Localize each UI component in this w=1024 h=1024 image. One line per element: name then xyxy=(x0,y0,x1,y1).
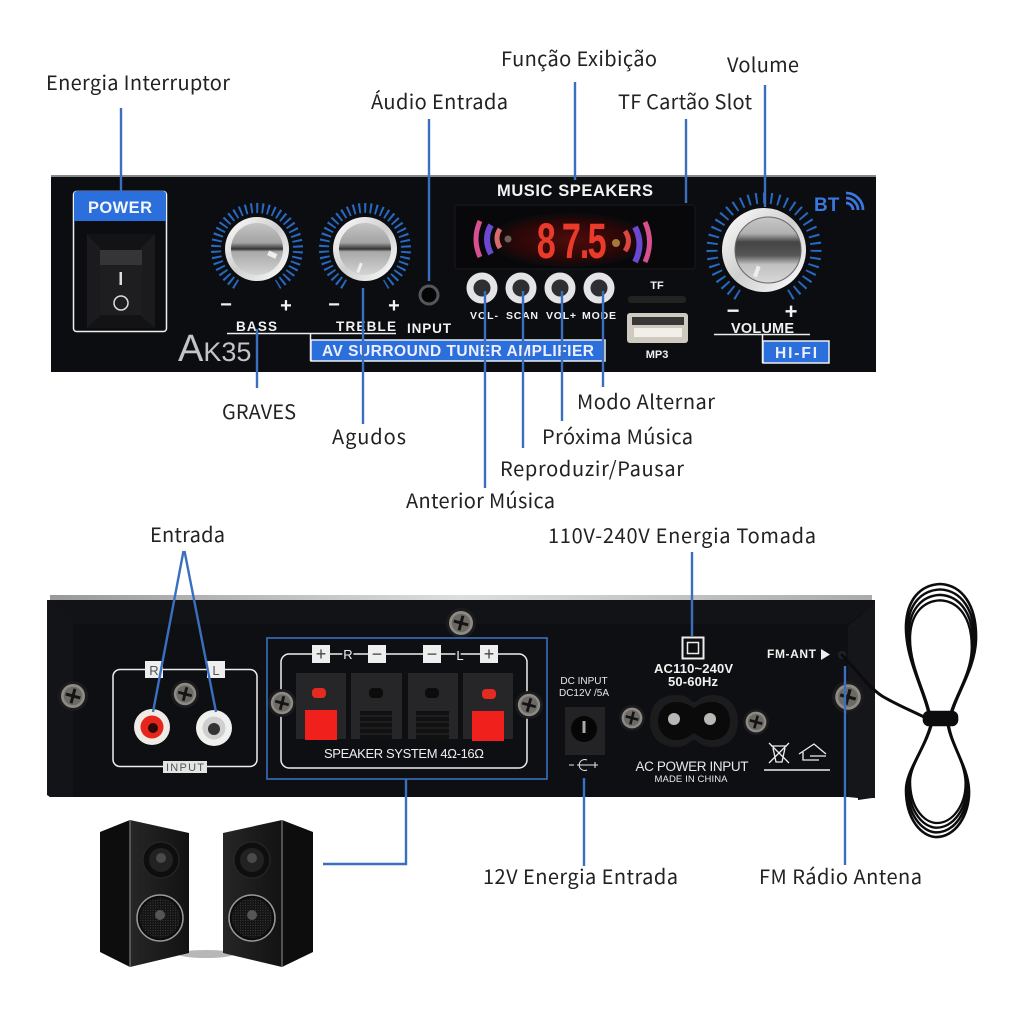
tuner amplifier banner xyxy=(227,334,605,361)
bass and treble marks: − xyxy=(328,294,340,316)
antenna screw xyxy=(832,681,864,713)
label: 12v energia entrada: 12V Energia Entrada xyxy=(483,861,678,890)
antenna cable xyxy=(842,584,976,837)
rca input block: INPUT xyxy=(166,762,204,774)
ac power input: AC110~240V xyxy=(654,661,733,676)
label: agudos: Agudos xyxy=(332,421,406,450)
left speaker xyxy=(100,820,189,967)
display heading: MUSIC SPEAKERS xyxy=(497,182,653,200)
tf slot and usb port: TF xyxy=(650,280,664,292)
front callout lines xyxy=(121,82,765,488)
rca input block: R xyxy=(149,663,159,678)
speaker shadow xyxy=(178,950,234,958)
speaker terminal block: SPEAKER SYSTEM 4Ω-16Ω xyxy=(324,746,484,761)
bass knob xyxy=(216,208,298,284)
speaker terminal block: L xyxy=(456,648,464,663)
label: 110v 240v energia tomada: 110V-240V Energia Tomada xyxy=(548,520,816,549)
volume knob xyxy=(712,198,816,295)
label: audio entrada: Áudio Entrada xyxy=(371,86,508,115)
rear panel xyxy=(47,595,875,800)
tf slot and usb port: MP3 xyxy=(646,349,668,361)
control buttons: VOL+ xyxy=(546,310,576,322)
bass and treble marks xyxy=(220,294,452,336)
label: volume: Volume xyxy=(727,49,799,78)
rear callout lines xyxy=(153,551,845,866)
volume marks and hi-fi badge xyxy=(714,298,829,363)
model name: AK35 xyxy=(178,328,251,370)
bass and treble marks: + xyxy=(280,295,292,317)
bluetooth logo xyxy=(814,193,863,216)
volume marks and hi-fi badge: HI-FI xyxy=(775,345,817,362)
right speaker xyxy=(223,820,313,967)
bass and treble marks: − xyxy=(220,294,232,316)
fm antenna label: FM-ANT xyxy=(767,647,817,661)
volume marks and hi-fi badge: − xyxy=(727,298,739,323)
input jack xyxy=(418,284,440,306)
bass and treble marks: + xyxy=(388,295,400,317)
frequency digits: 87.5 xyxy=(536,216,607,275)
label: funcao exibicao: Função Exibição xyxy=(501,43,657,72)
rca input block xyxy=(113,661,257,774)
label: entrada: Entrada xyxy=(150,519,225,548)
bass and treble marks: TREBLE xyxy=(336,319,396,334)
speaker terminal block: + xyxy=(316,644,326,664)
display right equalizer xyxy=(612,222,650,262)
speaker terminal block: + xyxy=(484,644,494,664)
control buttons: VOL- xyxy=(470,310,498,322)
fm antenna label xyxy=(767,647,846,661)
left screw xyxy=(58,681,88,711)
speaker terminal block: − xyxy=(372,644,382,664)
ac power input: MADE IN CHINA xyxy=(654,774,728,785)
speaker terminal block: − xyxy=(427,644,437,664)
rca input block: L xyxy=(212,663,220,678)
dc input: DC12V /5A xyxy=(559,688,609,699)
control buttons: SCAN xyxy=(506,310,538,322)
display xyxy=(455,205,695,275)
label: graves: GRAVES xyxy=(222,396,296,425)
ac power input: 50-60Hz xyxy=(668,674,718,689)
display left equalizer xyxy=(476,221,512,257)
label: reproduzir pausar: Reproduzir/Pausar xyxy=(500,453,684,482)
power switch block xyxy=(74,191,166,332)
volume marks and hi-fi badge: VOLUME xyxy=(731,321,794,337)
dc input: DC INPUT xyxy=(560,676,608,687)
control buttons: MODE xyxy=(582,310,616,322)
label: anterior musica: Anterior Música xyxy=(406,485,555,514)
volume marks and hi-fi badge: + xyxy=(785,299,797,324)
bluetooth logo: BT xyxy=(814,195,840,216)
label: fm radio antena: FM Rádio Antena xyxy=(759,861,922,890)
treble knob xyxy=(324,208,406,284)
dc input xyxy=(559,676,609,771)
bass and treble marks: INPUT xyxy=(407,321,452,336)
label: modo alternar: Modo Alternar xyxy=(577,386,715,415)
tuner amplifier banner: AV SURROUND TUNER AMPLIFIER xyxy=(322,343,594,360)
power switch block: POWER xyxy=(88,199,152,217)
top screw xyxy=(446,608,476,638)
speaker terminal block: R xyxy=(343,647,353,662)
tf slot and usb port xyxy=(627,280,688,361)
bass and treble marks: BASS xyxy=(236,319,277,334)
recycling and indoor icons xyxy=(764,743,830,770)
ac power input xyxy=(619,638,769,785)
front panel xyxy=(51,175,876,372)
ac power input: AC POWER INPUT xyxy=(636,759,748,774)
speaker terminal block xyxy=(268,644,543,768)
label: proxima musica: Próxima Música xyxy=(542,421,693,450)
label: tf cartao slot: TF Cartão Slot xyxy=(618,86,752,115)
control buttons xyxy=(470,276,616,322)
label: energia interruptor: Energia Interruptor xyxy=(46,67,230,96)
